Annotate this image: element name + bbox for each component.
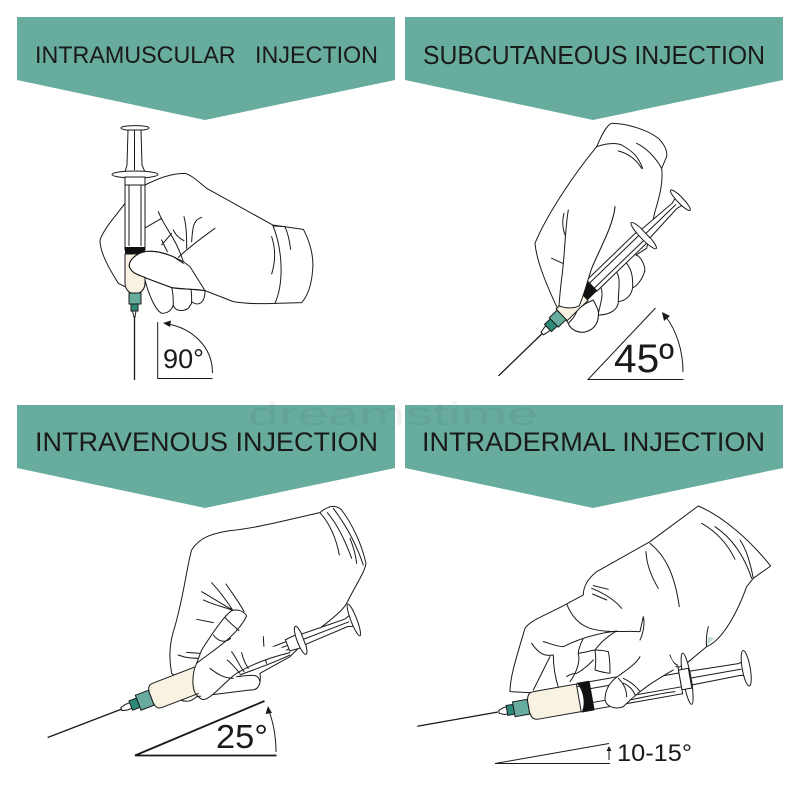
thumb and index finger bbox=[193, 610, 290, 699]
watermark: dreamstime bbox=[248, 396, 538, 432]
banner: subcutaneous injection: SUBCUTANEOUS INJECTION bbox=[423, 40, 765, 70]
illustration: gloved hand with syringe at 10-15 degrees bbox=[413, 506, 771, 752]
hand bbox=[510, 506, 771, 693]
hand bbox=[535, 123, 667, 332]
illustration: gloved hand with syringe at 45 degrees bbox=[486, 123, 695, 389]
banner: intramuscular injection bbox=[17, 17, 395, 120]
banner: intradermal injection: INTRADERMAL INJECTION bbox=[422, 427, 765, 457]
syringe bbox=[42, 603, 363, 753]
hand back bbox=[100, 173, 313, 313]
syringe bbox=[413, 642, 755, 752]
syringe bbox=[486, 185, 695, 389]
thumb bbox=[129, 251, 205, 305]
banner: intradermal injection bbox=[405, 405, 783, 508]
angle indicator: 90 degrees bbox=[158, 320, 212, 378]
angle indicator: 10-15 degrees bbox=[495, 740, 692, 767]
angle indicator: 45 degrees: 45º bbox=[614, 337, 674, 381]
syringe barrel with plunger and needle bbox=[112, 171, 158, 380]
angle indicator: 90 degrees: 90° bbox=[163, 344, 204, 374]
syringe upper part bbox=[121, 126, 149, 172]
illustration: gloved hand with syringe at 25 degrees bbox=[42, 506, 366, 753]
angle indicator: 10-15 degrees: 10-15° bbox=[617, 740, 692, 767]
angle indicator: 45 degrees bbox=[588, 308, 684, 381]
hand bbox=[170, 506, 366, 701]
banner: intramuscular injection: INTRAMUSCULAR INJECTION bbox=[35, 42, 378, 69]
thumb bbox=[605, 657, 677, 708]
banner: intravenous injection bbox=[17, 405, 395, 508]
banner: subcutaneous injection bbox=[405, 17, 783, 120]
angle indicator: 25 degrees bbox=[135, 701, 276, 756]
illustration: gloved hand with syringe at 90 degrees bbox=[100, 126, 313, 380]
index finger and front finger bbox=[559, 207, 615, 332]
banner: intravenous injection: INTRAVENOUS INJECTION bbox=[35, 427, 378, 457]
angle indicator: 25 degrees: 25° bbox=[216, 718, 268, 755]
